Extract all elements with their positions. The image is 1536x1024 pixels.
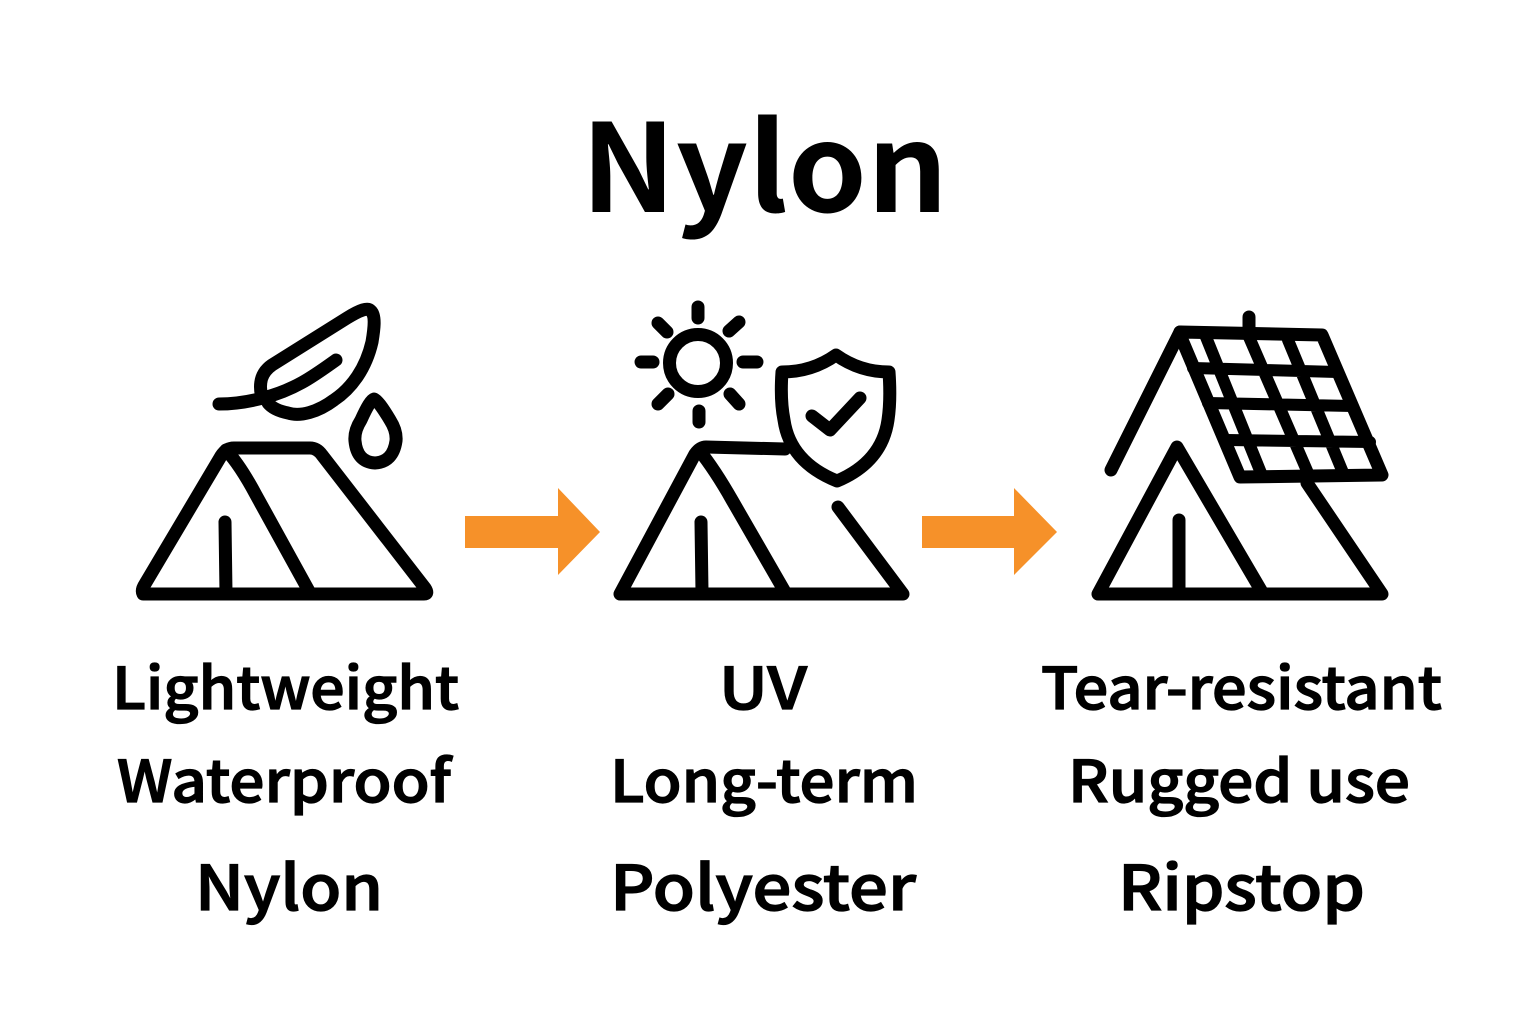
sun xyxy=(670,334,726,392)
label: Lightweight: Lightweight xyxy=(112,642,459,726)
column 3 text xyxy=(1041,642,1442,928)
label: Ripstop: Ripstop xyxy=(1118,838,1365,928)
label: Long-term: Long-term xyxy=(610,735,918,819)
shield xyxy=(781,355,890,481)
tent door xyxy=(701,522,702,592)
icon: ripstop tent with grid roof xyxy=(1098,317,1382,594)
roof antenna xyxy=(1242,317,1256,332)
label: UV: UV xyxy=(719,642,808,726)
tent door xyxy=(225,522,226,593)
label: Nylon: Nylon xyxy=(195,838,383,928)
icon: polyester tent with sun and shield xyxy=(620,307,903,594)
tent inner edge xyxy=(699,450,785,592)
sun rays xyxy=(641,307,757,422)
feather xyxy=(219,309,374,414)
label: Tear-resistant: Tear-resistant xyxy=(1041,642,1442,726)
title: Nylon xyxy=(581,71,948,248)
label: Rugged use: Rugged use xyxy=(1068,735,1410,819)
roof left edge xyxy=(1111,332,1180,470)
tent door xyxy=(1172,520,1186,592)
label: Polyester: Polyester xyxy=(610,838,917,928)
water drop xyxy=(355,399,396,463)
ripstop roof panel xyxy=(1180,332,1382,477)
tent outline xyxy=(620,447,903,594)
icon: nylon tent with feather and water drop xyxy=(142,309,427,594)
tent inner edge xyxy=(226,450,310,593)
tent outline xyxy=(142,448,427,594)
shield checkmark xyxy=(812,398,860,430)
tent base and inner outline xyxy=(1098,447,1382,594)
column 1 text xyxy=(112,642,459,928)
arrow 2 xyxy=(922,488,1057,575)
label: Waterproof: Waterproof xyxy=(117,735,453,819)
column 2 text xyxy=(610,642,918,928)
ripstop grid xyxy=(1193,337,1370,475)
arrow 1 xyxy=(465,488,600,575)
